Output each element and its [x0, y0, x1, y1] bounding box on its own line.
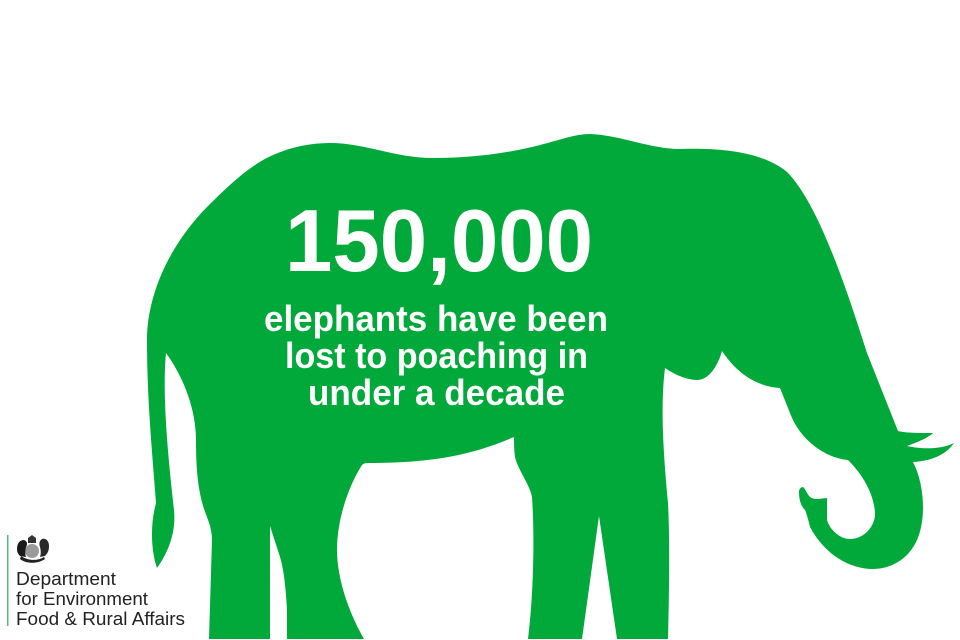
icon: royal crest — [17, 535, 49, 563]
logo wordmark: for Environment — [16, 589, 148, 609]
headline number: 150,000 — [285, 191, 593, 290]
caption text: elephants have been — [264, 298, 608, 339]
logo wordmark: Food & Rural Affairs — [16, 609, 185, 629]
logo wordmark — [16, 569, 185, 629]
elephant silhouette — [147, 134, 954, 639]
logo wordmark: Department — [16, 569, 116, 589]
caption text: under a decade — [308, 372, 565, 413]
caption text — [264, 298, 608, 413]
logo: Department for Environment Food & Rural Affairs — [7, 535, 185, 629]
caption text: lost to poaching in — [285, 335, 588, 376]
